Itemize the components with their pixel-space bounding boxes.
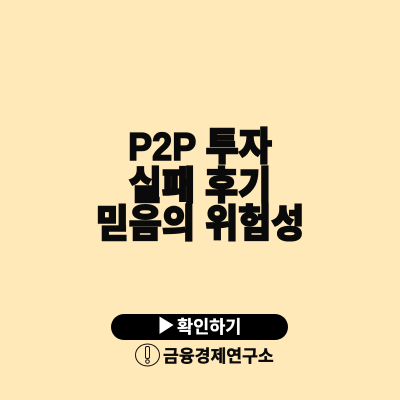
button label: 확인하기 bbox=[177, 317, 241, 337]
title: P2P 투자 bbox=[128, 125, 272, 168]
title: 믿음의 위험성 bbox=[96, 202, 304, 245]
brand name: 금융경제연구소 bbox=[163, 346, 274, 366]
icon: play triangle bbox=[160, 316, 174, 334]
icon: exclamation circle bbox=[135, 344, 160, 366]
title: 실패 후기 bbox=[129, 163, 271, 207]
button: 확인하기 bbox=[111, 314, 288, 340]
title bbox=[96, 125, 304, 245]
